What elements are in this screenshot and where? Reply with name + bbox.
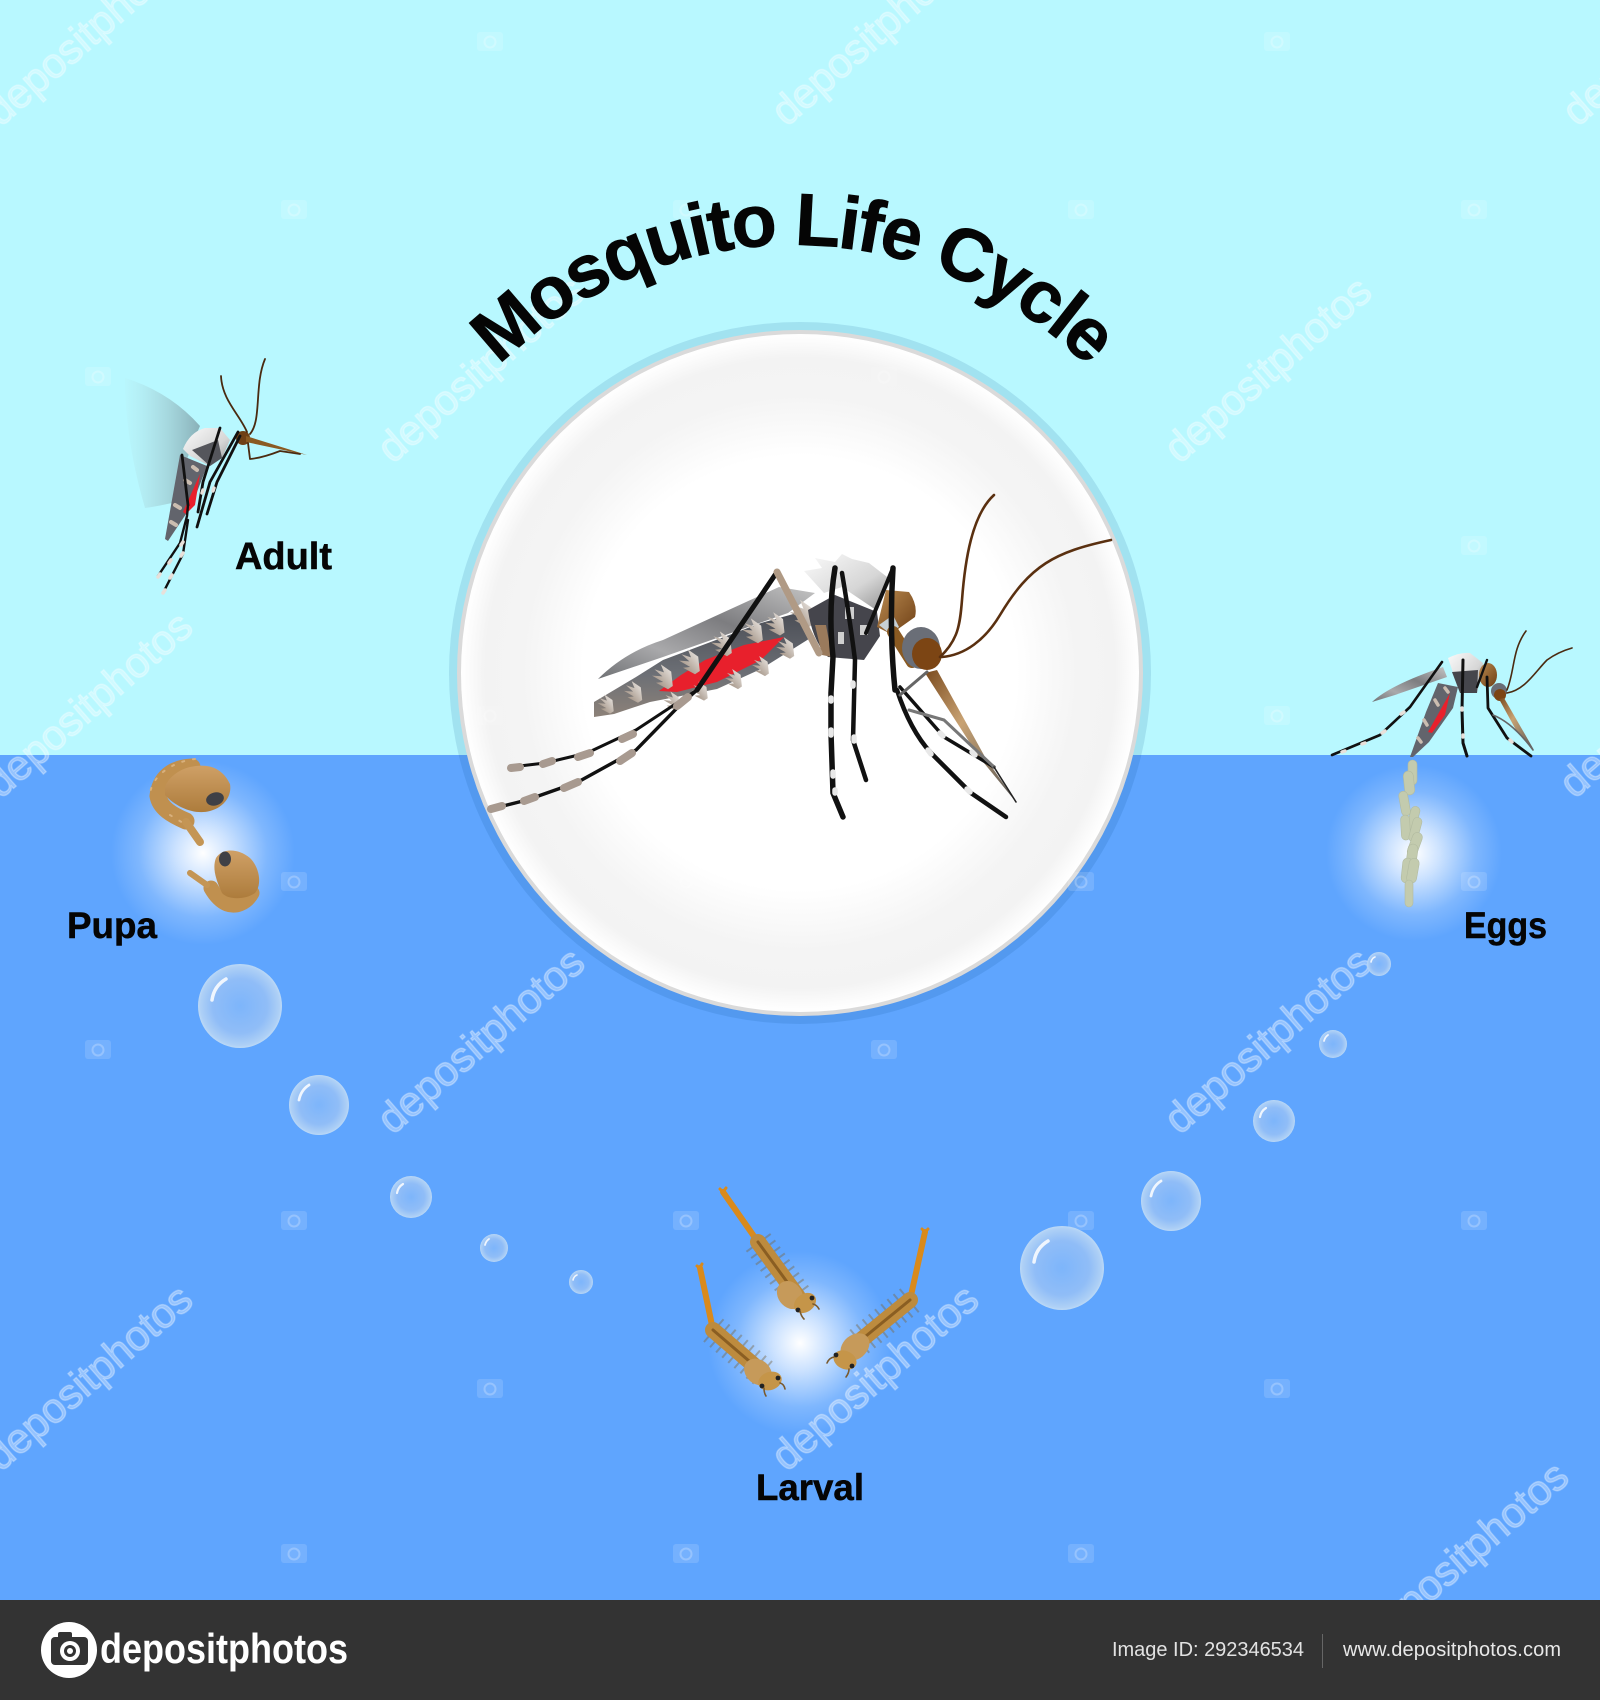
bubble <box>1319 1030 1347 1058</box>
pupa: upper <box>150 759 230 842</box>
eggs <box>1398 760 1424 907</box>
abdomen <box>1410 683 1458 757</box>
glow behind larvae <box>708 1251 892 1435</box>
thorax <box>1448 653 1483 693</box>
head <box>902 627 940 669</box>
thorax <box>183 428 230 466</box>
background: water <box>0 755 1600 1600</box>
legs <box>1332 660 1533 756</box>
watermark: depositphotos <box>368 938 593 1142</box>
bubbles: right trail <box>1020 952 1391 1310</box>
thorax dome <box>804 554 891 610</box>
bubble <box>569 1270 593 1294</box>
wing <box>1372 667 1447 702</box>
background: sky <box>0 0 1600 756</box>
proboscis <box>925 670 1016 802</box>
egg laying mosquito <box>1332 631 1572 757</box>
middle legs <box>831 568 866 817</box>
bubble <box>289 1075 349 1135</box>
adult mosquito with blurred wings <box>125 359 307 593</box>
abdomen <box>165 455 207 541</box>
bubble <box>480 1234 508 1262</box>
back legs <box>491 572 819 809</box>
wing <box>598 587 815 679</box>
bubble <box>1141 1171 1201 1231</box>
wing blur <box>125 378 200 508</box>
watermark: depositphotos <box>762 602 987 806</box>
abdomen <box>594 613 812 717</box>
footer image id: Image ID: 292346534 <box>1112 1639 1304 1661</box>
proboscis <box>246 436 307 455</box>
main mosquito <box>491 495 1111 817</box>
larva: left <box>697 1264 785 1396</box>
head <box>1491 683 1507 699</box>
watermark: depositphotos <box>1155 267 1380 471</box>
footer bar <box>0 1600 1600 1700</box>
thorax <box>808 595 880 660</box>
blood stripe <box>659 637 784 692</box>
glow behind eggs <box>1326 765 1502 941</box>
larva: right <box>827 1229 928 1377</box>
bubble <box>1253 1100 1295 1142</box>
bubbles: left trail <box>198 964 593 1294</box>
larva: top <box>720 1188 820 1319</box>
label: Eggs: Eggs <box>1464 905 1547 946</box>
label: Larval: Larval <box>756 1467 864 1508</box>
watermark: depositphotos <box>762 1275 987 1479</box>
front legs <box>866 568 1016 817</box>
central circle <box>449 322 1151 1024</box>
head <box>236 431 250 445</box>
scutum <box>877 590 916 634</box>
footer logo text: depositphotos <box>100 1625 348 1672</box>
proboscis <box>1499 698 1534 750</box>
antennae <box>1507 631 1572 693</box>
glow behind pupae <box>111 761 295 945</box>
watermark: depositphotos <box>1352 1452 1577 1656</box>
bubble <box>1367 952 1391 976</box>
legs <box>158 428 240 593</box>
watermark: depositphotos <box>1155 938 1380 1142</box>
label: Pupa: Pupa <box>67 905 157 946</box>
footer website: www.depositphotos.com <box>1342 1639 1561 1661</box>
title: Mosquito Life Cycle <box>468 194 1108 362</box>
bubble <box>198 964 282 1048</box>
scale tufts <box>598 600 813 714</box>
bubble <box>1020 1226 1104 1310</box>
neck <box>893 632 912 662</box>
footer logo icon <box>41 1622 97 1678</box>
antennae <box>940 495 1111 657</box>
pupa: lower <box>190 850 259 905</box>
watermark: depositphotos <box>368 267 593 471</box>
label: Adult: Adult <box>235 536 332 578</box>
bubble <box>390 1176 432 1218</box>
antennae <box>221 359 300 459</box>
